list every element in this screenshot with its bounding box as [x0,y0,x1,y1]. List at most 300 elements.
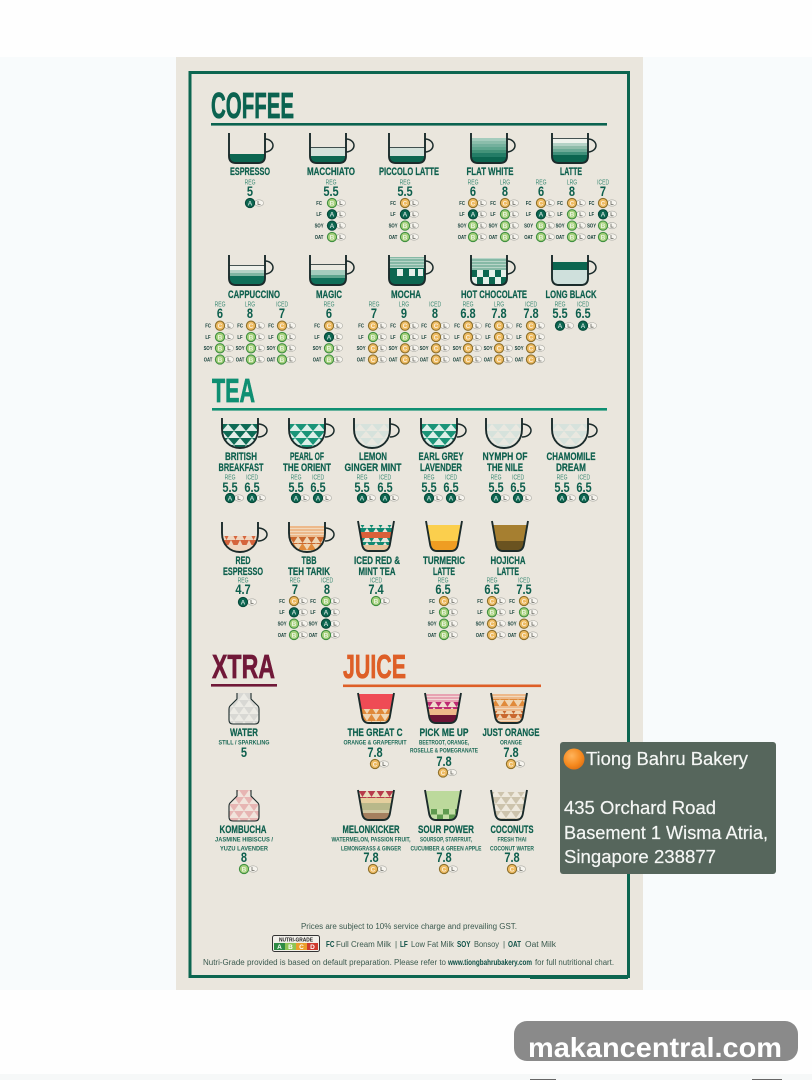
drink: chamomile dream: DREAM [556,462,586,474]
icon: macchiato cup [310,133,354,163]
drink: hojicha latte: HOJICHA [490,555,526,567]
footer: nutri-grade logo: B [288,944,293,951]
drink: flat white: FLAT WHITE [466,166,514,178]
drink: latte: 6 [538,184,544,199]
drink: hojicha latte: 6.5 [484,582,500,597]
drink: earl grey lavender: EARL GREY [418,451,464,463]
drink: piccolo latte: A [403,212,408,219]
drink: hojicha latte: LF [509,610,515,615]
drink: mocha: C [371,323,376,330]
drink: flat white: B [471,234,476,241]
drink: flat white: B [503,212,508,219]
location tooltip [560,742,776,874]
drink: red espresso: REG [238,577,249,585]
drink: pearl of the orient: THE ORIENT [283,462,331,474]
drink: flat white [458,133,519,242]
footer: nutri-grade logo: C [299,944,304,951]
drink: earl grey lavender: 6.5 [443,480,459,495]
drink: lemon ginger mint: A [383,495,388,502]
drink: flat white: SOY [489,223,498,228]
drink: latte: LF [526,212,531,217]
drink: flat white: LF [490,212,496,217]
drink: nymph of the nile: A [516,495,521,502]
drink: water: STILL / SPARKLING [218,740,270,746]
drink: water: WATER [230,727,258,739]
drink: mocha: MOCHA [391,289,421,301]
drink: macchiato: SOY [315,223,324,228]
drink: tbb teh tarik: A [324,610,329,617]
heading: xtra [211,648,277,687]
drink: coconuts: FRESH THAI [498,836,527,844]
drink: mocha: OAT [389,357,397,362]
drink: cappuccino: CAPPUCCINO [228,289,280,301]
drink: piccolo latte: OAT [389,234,397,240]
drink: turmeric latte: FC [429,598,435,604]
drink: british breakfast: 6.5 [244,480,260,495]
drink: mocha: 8 [432,306,438,321]
drink: hojicha latte: OAT [476,632,484,638]
drink: piccolo latte: FC [390,200,396,206]
drink: piccolo latte: C [403,200,408,207]
heading: coffee: COFFEE [211,85,294,126]
drink: kombucha: 8 [241,850,247,865]
icon: red espresso cup [222,522,267,552]
drink: cappuccino: OAT [267,357,275,362]
drink: the great c: ORANGE & GRAPEFRUIT [344,740,407,746]
drink: nymph of the nile: 6.5 [510,480,526,495]
drink: earl grey lavender: ICED [445,474,458,482]
drink: melonkicker: MELONKICKER [342,824,400,836]
drink: kombucha: KOMBUCHA [220,824,267,836]
drink: mocha: 7 [371,306,377,321]
drink: kombucha: YUZU LAVENDER [220,846,268,852]
drink: sour power: CUCUMBER & GREEN APPLE [410,846,482,852]
drink: flat white: REG [468,179,479,187]
footer: milk legend: FC [326,939,335,949]
drink: tbb teh tarik: REG [290,577,301,585]
drink: earl grey lavender: 5.5 [421,480,437,495]
icon: turmeric latte glass [426,521,462,551]
icon: long black cup [552,255,596,285]
drink: earl grey lavender [418,418,466,503]
drink: mocha: C [403,346,408,353]
drink: espresso: REG [245,179,256,187]
drink: tbb teh tarik: B [324,598,329,605]
drink: pearl of the orient: 5.5 [288,480,304,495]
footer: nutri-grade logo: A [277,944,282,951]
footer: nutri-grade logo [272,936,320,952]
drink: hojicha latte: C [490,621,495,628]
drink: latte: B [570,212,575,219]
drink: magic [310,255,354,364]
drink: chamomile dream: REG [557,474,568,482]
drink: lemon ginger mint: REG [357,474,368,482]
footer: milk legend: Full Cream Milk [336,940,392,949]
drink: hot chocolate: LF [516,334,522,340]
drink: kombucha [215,790,273,874]
drink: latte: FC [589,200,595,206]
icon: magic cup [310,255,354,285]
drink: nymph of the nile: A [494,495,499,502]
drink: mocha: REG [369,301,380,309]
drink: hot chocolate: OAT [453,357,461,362]
drink: latte: B [570,223,575,230]
drink: tbb teh tarik: A [324,621,329,628]
drink: hot chocolate: C [529,323,534,330]
icon: espresso cup [229,133,273,163]
drink: flat white: C [471,200,476,207]
drink: latte: SOY [556,223,565,228]
drink: melonkicker: C [371,866,376,873]
drink: hot chocolate: SOY [515,346,524,351]
drink: tbb teh tarik: LF [279,610,285,615]
drink: hot chocolate: 7.8 [491,306,507,321]
drink: british breakfast: BRITISH [225,451,257,463]
icon: hojicha latte glass [492,521,528,551]
drink: long black: LONG BLACK [546,289,597,301]
drink: flat white: FC [490,200,496,206]
drink: hot chocolate: LRG [494,301,504,309]
drink: turmeric latte: LF [429,610,435,615]
drink: latte: B [570,234,575,241]
drink: iced red and mint tea: B [374,598,379,605]
drink: flat white: LF [459,212,465,217]
drink: mocha: C [434,346,439,353]
drink: pearl of the orient: ICED [312,474,325,482]
icon: british breakfast cup [222,418,267,448]
drink: tbb teh tarik: C [292,598,297,605]
drink: latte: B [601,223,606,230]
drink: flat white: LRG [500,179,510,187]
drink: turmeric latte: OAT [428,632,436,638]
drink: tbb teh tarik: LF [310,610,316,615]
drink: tbb teh tarik: ICED [321,577,334,585]
drink: chamomile dream: CHAMOMILE [546,451,596,463]
drink: latte: OAT [556,234,564,240]
drink: latte: LF [589,212,594,217]
drink: coconuts: C [510,866,515,873]
drink: hojicha latte: SOY [476,621,485,627]
drink: piccolo latte: B [403,234,408,241]
drink: flat white: 6 [470,184,476,199]
drink: latte [524,133,617,242]
drink: tbb teh tarik: A [292,610,297,617]
drink: nymph of the nile [482,418,532,503]
drink: the great c [344,693,407,769]
drink: mocha: C [371,346,376,353]
drink: pearl of the orient: A [316,495,321,502]
drink: latte: SOY [524,223,534,228]
drink: tbb teh tarik: TBB [302,555,317,567]
footer: nutri-grade note: Nutri-Grade provided is based on default preparation. Please refer to [203,958,447,967]
drink: hot chocolate: C [466,334,471,341]
drink: pick me up: PICK ME UP [420,727,468,739]
drink: latte: 7 [600,184,606,199]
drink: mocha: C [434,334,439,341]
drink: latte: C [570,200,575,207]
poster background [176,57,643,990]
drink: magic: 6 [326,306,332,321]
drink: tbb teh tarik: 7 [292,582,298,597]
drink: espresso: 5 [247,184,253,199]
drink: hojicha latte [476,521,538,640]
drink: coconuts [490,790,534,874]
drink: latte: ICED [597,179,610,187]
drink: turmeric latte [423,521,465,640]
icon: cappuccino cup [229,255,273,285]
drink: magic: SOY [313,346,322,351]
drink: mocha: FC [390,323,396,329]
drink: macchiato: LF [316,212,322,217]
drink: hojicha latte: FC [509,598,515,604]
drink: tbb teh tarik: SOY [278,621,287,627]
icon: nymph of the nile cup [486,418,531,448]
drink: tbb teh tarik: 8 [324,582,330,597]
drink: just orange: 7.8 [503,745,519,760]
drink: hot chocolate: C [497,346,502,353]
drink: piccolo latte: PICCOLO LATTE [379,166,439,178]
drink: hot chocolate: SOY [453,346,462,351]
drink: iced red and mint tea: 7.4 [368,582,384,597]
footer: milk legend: Oat Milk [525,940,557,949]
drink: flat white: SOY [458,223,467,228]
drink: lemon ginger mint: LEMON [359,451,387,463]
drink: hot chocolate: LF [485,334,491,340]
drink: tbb teh tarik: FC [279,598,285,604]
drink: cappuccino [204,255,296,364]
drink: piccolo latte: LF [390,212,396,217]
drink: pearl of the orient: PEARL OF [290,451,324,463]
drink: turmeric latte: B [442,621,447,628]
drink: macchiato: B [330,234,335,241]
drink: latte: LF [557,212,563,217]
drink: cappuccino: FC [268,323,274,329]
drink: cappuccino: ICED [276,301,289,309]
drink: lemon ginger mint: 5.5 [354,480,370,495]
drink: hot chocolate [453,255,545,364]
drink: lemon ginger mint: 6.5 [377,480,393,495]
drink: cappuccino: B [280,357,285,364]
drink: cappuccino: B [280,334,285,341]
drink: hot chocolate: C [466,323,471,330]
drink: chamomile dream: 5.5 [554,480,570,495]
drink: cappuccino: B [280,346,285,353]
drink: piccolo latte [379,133,439,242]
drink: flat white: B [503,223,508,230]
drink: latte: LRG [567,179,577,187]
drink: magic: FC [314,323,320,329]
drink: cappuccino: SOY [204,346,213,351]
drink: flat white: A [471,212,476,219]
drink: red espresso: A [241,599,246,606]
drink: mocha: LF [421,334,427,340]
drink: hojicha latte: SOY [508,621,517,627]
drink: latte: A [601,212,606,219]
drink: just orange [482,693,540,769]
drink: hojicha latte: FC [477,598,483,604]
drink: pearl of the orient: 6.5 [310,480,326,495]
drink: mocha: B [403,334,408,341]
drink: cappuccino: C [218,323,223,330]
footer: milk legend: Bonsoy [474,940,499,949]
drink: cappuccino: B [249,346,254,353]
drink: mocha: C [403,323,408,330]
drink: hot chocolate: C [497,334,502,341]
drink: british breakfast: A [250,495,255,502]
drink: kombucha: B [242,866,247,873]
footer: milk legend: | [395,940,397,949]
heading: juice: JUICE [343,648,406,685]
drink: macchiato: B [330,200,335,207]
drink: cappuccino: B [218,357,223,364]
drink: turmeric latte: SOY [428,621,437,627]
heading: xtra: XTRA [212,648,275,685]
drink: flat white: B [503,234,508,241]
drink: hojicha latte: C [522,621,527,628]
icon: orange ball [564,748,584,770]
drink: macchiato: REG [326,179,337,187]
drink: cappuccino: B [218,334,223,341]
drink: just orange: ORANGE [500,740,523,746]
drink: magic: B [327,346,332,353]
drink: tbb teh tarik: B [292,621,297,628]
drink: latte: B [601,234,606,241]
drink: mocha: C [434,357,439,364]
drink: flat white: C [503,200,508,207]
drink: tbb teh tarik: FC [310,598,316,604]
icon: tbb teh tarik cup [289,522,334,552]
drink: chamomile dream [546,418,598,503]
drink: pick me up: C [441,770,446,777]
drink: hojicha latte: LATTE [497,566,519,578]
drink: iced red and mint tea: MINT TEA [358,566,396,578]
icon: just orange glass [491,693,527,723]
drink: hojicha latte: B [490,610,495,617]
drink: nymph of the nile: NYMPH OF [482,451,528,463]
drink: macchiato: OAT [315,234,323,240]
drink: cappuccino: B [249,357,254,364]
location tooltip: Singapore 238877 [564,846,716,867]
drink: mocha: SOY [389,346,398,351]
icon: chamomile dream cup [552,418,597,448]
drink: mocha: C [403,357,408,364]
drink: hot chocolate: FC [485,323,491,329]
footer: nutri-grade note: www.tiongbahrubakery.com [447,958,532,967]
icon: coconuts glass [491,790,527,820]
icon: sour power glass [425,790,462,820]
drink: piccolo latte: REG [400,179,411,187]
drink: cappuccino: FC [205,323,211,329]
drink: nymph of the nile: THE NILE [487,462,523,474]
drink: cappuccino: 7 [279,306,285,321]
drink: flat white: OAT [489,234,497,240]
drink: magic: A [327,334,332,341]
drink: latte: B [539,223,544,230]
drink: melonkicker [332,790,411,874]
drink: tbb teh tarik: B [324,632,329,639]
drink: long black: 5.5 [552,306,568,321]
drink: lemon ginger mint: A [360,495,365,502]
drink: hot chocolate: OAT [515,357,523,362]
drink: latte: A [539,212,544,219]
drink: hot chocolate: C [529,357,534,364]
drink: hojicha latte: C [522,632,527,639]
drink: flat white: FC [459,200,465,206]
drink: hot chocolate: LF [454,334,460,340]
drink: espresso [229,133,273,208]
drink: hot chocolate: SOY [484,346,493,351]
drink: british breakfast: REG [225,474,236,482]
drink: flat white: OAT [458,234,466,240]
drink: earl grey lavender: A [449,495,454,502]
icon: kombucha bottle [229,790,259,821]
drink: hot chocolate: C [529,346,534,353]
icon: melonkicker glass [358,790,394,820]
drink: cappuccino: LF [268,334,274,340]
drink: cappuccino: LF [205,334,211,340]
drink: hojicha latte: OAT [508,632,516,638]
icon: flat white cup [471,133,515,163]
drink: pearl of the orient: REG [291,474,302,482]
drink: cappuccino: SOY [236,346,245,351]
drink: turmeric latte: C [442,598,447,605]
drink: just orange: JUST ORANGE [482,727,540,739]
drink: mocha: ICED [429,301,442,309]
drink: iced red and mint tea: ICED [370,577,383,585]
drink: chamomile dream: ICED [578,474,591,482]
location tooltip: 435 Orchard Road [564,797,716,818]
drink: long black: ICED [577,301,590,309]
drink: hot chocolate: REG [463,301,474,309]
icon: pick me up glass [425,693,462,723]
drink: turmeric latte: B [442,610,447,617]
location tooltip: Basement 1 Wisma Atria, [564,822,768,843]
drink: cappuccino: FC [237,323,243,329]
drink: melonkicker: WATERMELON, PASSION FRUIT, [332,836,411,844]
drink: mocha: SOY [420,346,429,351]
drink: magic: REG [324,301,335,309]
drink: tbb teh tarik: SOY [309,621,318,627]
icon: water bottle [229,693,259,724]
drink: magic: MAGIC [316,289,342,301]
drink: turmeric latte: LATTE [433,566,455,578]
drink: cappuccino: OAT [204,357,212,362]
footer: milk legend: | [503,940,505,949]
drink: piccolo latte: SOY [389,223,398,228]
drink: chamomile dream: 6.5 [576,480,592,495]
drink: chamomile dream: A [560,495,565,502]
drink: hot chocolate: C [466,346,471,353]
drink: macchiato: A [330,223,335,230]
drink: nymph of the nile: REG [491,474,502,482]
drink: hot chocolate: OAT [484,357,492,362]
drink: macchiato: A [330,212,335,219]
drink: hot chocolate: FC [516,323,522,329]
drink: lemon ginger mint: GINGER MINT [344,462,402,474]
drink: earl grey lavender: LAVENDER [420,462,462,474]
drink: macchiato: MACCHIATO [307,166,355,178]
drink: macchiato: 5.5 [323,184,339,199]
location tooltip: Tiong Bahru Bakery [586,748,749,769]
watermark: makancentral.com [514,1021,798,1063]
drink: cappuccino: C [249,323,254,330]
drink: turmeric latte: REG [438,577,449,585]
drink: british breakfast: BREAKFAST [218,462,264,474]
drink: nymph of the nile: 5.5 [488,480,504,495]
drink: hojicha latte: 7.5 [516,582,532,597]
drink: hojicha latte: REG [487,577,498,585]
drink: pearl of the orient: A [294,495,299,502]
